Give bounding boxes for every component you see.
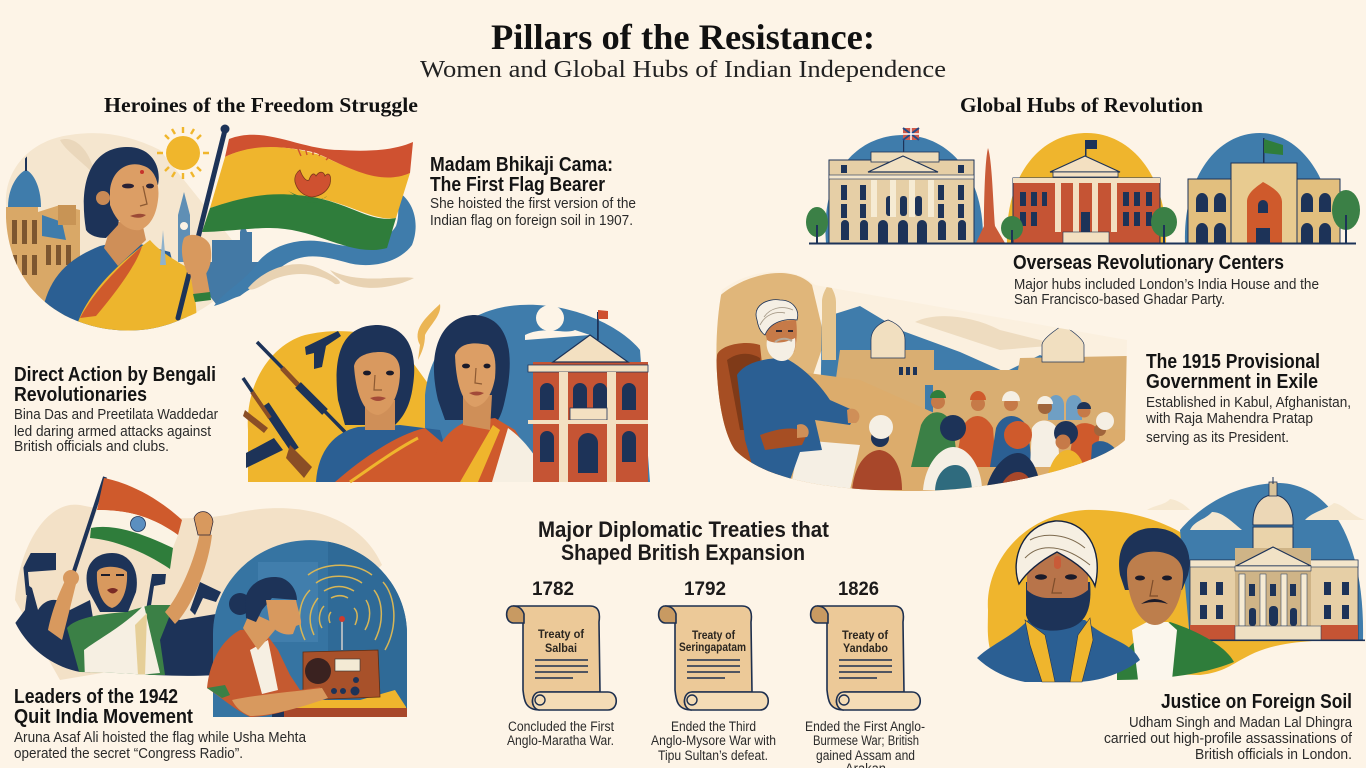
beige hill backdrop (15, 505, 382, 680)
text: Overseas Centers: Overseas Revolutionary Centers (1013, 252, 1284, 274)
text: Direct Action: Revolutionaries (14, 384, 147, 406)
illustration: Udham Singh and Madan Lal Dhingra (977, 477, 1365, 682)
flag (202, 135, 413, 250)
blue room (213, 540, 408, 718)
text: Leaders of Quit India: Aruna Asaf Ali hoisted the flag while Usha Mehta (14, 730, 307, 746)
pole (54, 477, 105, 632)
text: Justice on Foreign Soil: British officials in London. (1195, 747, 1352, 763)
heading: treaties: Shaped British Expansion (561, 540, 805, 565)
man: trousers (790, 440, 860, 490)
text: Direct Action: Bina Das and Preetilata Waddedar (14, 407, 218, 423)
treaty: Yandabo 1826: Treaty of (842, 628, 889, 642)
illustration: 1915 provisional government (716, 273, 1127, 491)
text: Madam Bhikaji Cama: The First Flag Bearer (430, 174, 605, 196)
treaty: Yandabo 1826: gained Assam and (816, 748, 915, 763)
chair (716, 343, 780, 480)
tricolor flag (90, 478, 182, 569)
minaret (822, 282, 836, 360)
text: Madam Bhikaji Cama (430, 154, 636, 229)
skyline (160, 192, 262, 304)
text: Justice on Foreign Soil (1104, 691, 1353, 763)
text: Direct Action: British officials and clubs. (14, 439, 169, 455)
treaty: Yandabo 1826: Ended the First Anglo- (805, 719, 925, 734)
illustration: Bengali revolutionaries (243, 304, 650, 482)
clouds (1147, 499, 1365, 530)
antenna tip (339, 616, 345, 622)
treaty: Seringapatam 1792: 1792 (684, 578, 726, 600)
blue sky (1180, 483, 1363, 640)
text: Overseas Centers: Major hubs included London’s India House and the (1014, 277, 1319, 293)
London India House (825, 128, 983, 243)
yellow sun (988, 510, 1362, 675)
text: 1915 Provisional Government: Established in Kabul, Afghanistan, (1146, 395, 1351, 411)
text: Justice on Foreign Soil: carried out high-profile assassinations of (1104, 731, 1353, 747)
treaty: Salbai 1782: Treaty of (538, 627, 585, 641)
treaty: Seringapatam 1792: Seringapatam (679, 640, 746, 654)
treaty: Yandabo 1826: 1826 (838, 578, 879, 600)
ground line (809, 242, 1356, 244)
heading: global hubs: Global Hubs of Revolution (960, 93, 1203, 117)
woman head (87, 553, 137, 612)
Kabul palace (1185, 133, 1340, 243)
text: Leaders of Quit India (14, 686, 307, 762)
pole (178, 130, 225, 318)
heading: treaties: Major Diplomatic Treaties that (538, 517, 830, 542)
text: Leaders of Quit India: operated the secret “Congress Radio”. (14, 746, 243, 762)
text: Leaders of Quit India: Quit India Movement (14, 706, 193, 728)
illustration: Quit India Movement (10, 477, 408, 718)
title (420, 17, 946, 83)
text: Madam Bhikaji Cama: Madam Bhikaji Cama: (430, 154, 613, 176)
treaty: Salbai 1782: Salbai (545, 641, 577, 655)
treaty: Salbai 1782 (507, 578, 616, 748)
text: Madam Bhikaji Cama: Indian flag on foreign soil in 1907. (430, 213, 633, 229)
flame (418, 304, 440, 360)
treaty: Salbai 1782: Concluded the First (508, 719, 614, 734)
treaty: Yandabo 1826 (805, 578, 925, 768)
Usha Mehta (207, 577, 328, 717)
heading: treaties (538, 517, 830, 565)
treaty: Salbai 1782: 1782 (532, 578, 574, 600)
text: Direct Action (14, 364, 218, 455)
pistol (305, 331, 341, 369)
arm and hand (182, 235, 211, 302)
treaty: Yandabo 1826: Burmese War; British (813, 733, 919, 748)
woman 2 (434, 315, 510, 420)
text: Overseas Centers: San Francisco-based Ghadar Party. (1014, 292, 1225, 308)
text: 1915 Provisional Government (1145, 351, 1351, 446)
San Francisco hall (1007, 133, 1166, 243)
treaty: Yandabo 1826: Yandabo (843, 641, 888, 655)
seated crowd (852, 390, 1122, 492)
radio (303, 650, 380, 700)
fort walls (836, 350, 934, 409)
treaty: Seringapatam 1792 (651, 578, 776, 763)
beige swirl (248, 264, 414, 290)
treaty: Seringapatam 1792: Tipu Sultan’s defeat. (658, 748, 768, 763)
treaty: Salbai 1782: Anglo-Maratha War. (507, 733, 614, 748)
illustration: Global hub buildings (806, 128, 1360, 244)
AK rifle (243, 378, 312, 478)
radio antenna (341, 620, 343, 650)
trees (806, 190, 1360, 243)
treaty: Seringapatam 1792: Treaty of (692, 628, 736, 642)
text: Overseas Centers (1013, 252, 1319, 308)
text: 1915 Provisional Government: The 1915 Provisional (1146, 351, 1320, 373)
man: head (765, 320, 797, 352)
radio waves (300, 565, 394, 650)
text: Direct Action: Direct Action by Bengali (14, 364, 216, 386)
text: 1915 Provisional Government: Government in Exile (1146, 371, 1318, 393)
text: Direct Action: led daring armed attacks against (14, 424, 211, 440)
illustration: Bhikaji Cama with flag (6, 124, 416, 335)
college building (528, 310, 648, 482)
raised arm (165, 532, 212, 624)
Udham Singh (977, 521, 1140, 682)
treaty: Seringapatam 1792: Anglo-Mysore War with (651, 733, 776, 748)
text: Justice on Foreign Soil: Udham Singh and Madan Lal Dhingra (1129, 715, 1353, 731)
obelisk (976, 148, 1005, 243)
rifle (257, 342, 345, 432)
table (283, 690, 406, 717)
title: Women and Global Hubs of Indian Independence (420, 57, 946, 83)
text: 1915 Provisional Government: serving as its President. (1146, 430, 1289, 446)
sun (157, 127, 209, 179)
text: Leaders of Quit India: Leaders of the 1942 (14, 686, 178, 708)
text: Madam Bhikaji Cama: She hoisted the first version of the (430, 196, 636, 212)
capitol building (1190, 477, 1365, 641)
text: 1915 Provisional Government: with Raja Mahendra Pratap (1145, 411, 1313, 427)
heading: heroines: Heroines of the Freedom Struggle (104, 93, 418, 117)
blue wave (214, 190, 416, 306)
left arm with hand (48, 575, 77, 640)
man: coat (737, 358, 857, 480)
title: Pillars of the Resistance: (491, 17, 875, 57)
Madan Lal Dhingra (1117, 528, 1234, 680)
treaty: Seringapatam 1792: Ended the Third (671, 719, 756, 734)
woman 1 (337, 325, 414, 425)
